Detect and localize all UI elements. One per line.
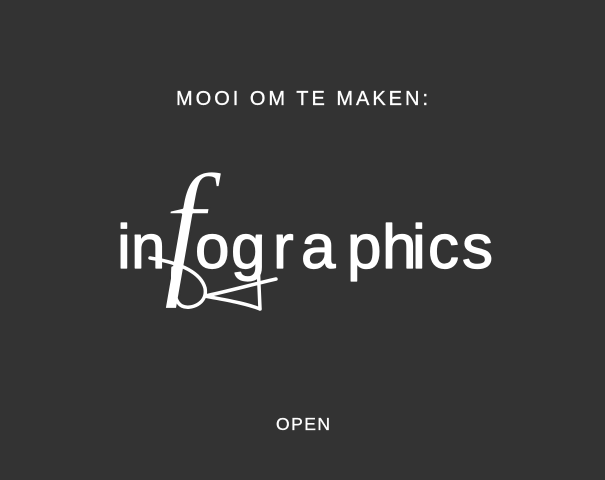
wordmark: infographics: in [117,213,165,282]
wordmark: infographics [117,144,493,310]
wordmark: infographics: f [163,144,222,310]
heading: mooi om te maken: MOOI OM TE MAKEN: [176,88,428,110]
wordmark: infographics: ographics [195,213,493,282]
flourish: tail under the wordmark [150,258,276,309]
button label: open: OPEN [276,414,330,434]
